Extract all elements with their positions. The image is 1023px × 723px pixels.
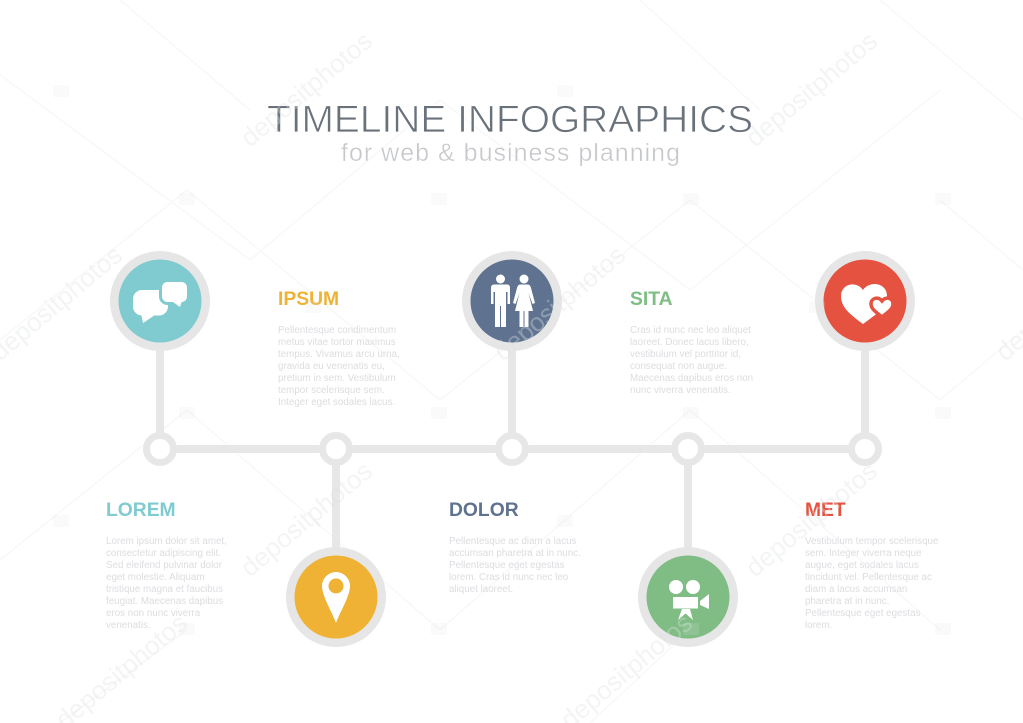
text block: lorem: tristique magna et faucibus xyxy=(106,584,223,595)
text block: sita: SITA xyxy=(630,289,673,310)
timeline connector xyxy=(146,345,878,555)
text block: dolor: Pellentesque ac diam a lacus xyxy=(449,536,577,547)
text block: ipsum xyxy=(278,289,400,408)
icon: movie camera xyxy=(638,547,738,647)
text block: ipsum: gravida eu venenatis eu, xyxy=(278,361,385,372)
text block: sita: Maecenas dapibus eros non xyxy=(630,373,753,384)
text block: met: pharetra at in nunc. xyxy=(805,596,889,607)
text: depositphotos xyxy=(235,26,378,153)
subtitle: for web & business planning xyxy=(341,139,680,167)
icon: man and woman xyxy=(462,251,562,351)
text: depositphotos xyxy=(235,456,378,583)
text block: sita: nunc viverra venenatis. xyxy=(630,385,731,396)
text block: met: sem. Integer viverra neque xyxy=(805,548,922,559)
text block: lorem: feugiat. Maecenas dapibus xyxy=(106,596,223,607)
text block: dolor xyxy=(449,500,581,595)
text block: lorem: eros non nunc viverra xyxy=(106,608,201,619)
text block: dolor: lorem. Cras id nunc nec leo xyxy=(449,572,569,583)
text block: lorem: Lorem ipsum dolor sit amet, xyxy=(106,536,227,547)
text block: sita: laoreet. Donec lacus libero, xyxy=(630,337,749,348)
text: depositphotos xyxy=(740,26,883,153)
text block: dolor: Pellentesque eget egestas xyxy=(449,560,565,571)
text block: dolor: accumsan pharetra at in nunc. xyxy=(449,548,581,559)
text block: ipsum: metus vitae tortor maximus xyxy=(278,337,396,348)
text block: met: augue, eget sodales lacus xyxy=(805,560,919,571)
text block: ipsum: tempus. Vivamus arcu urna, xyxy=(278,349,400,360)
text block: met: lorem. xyxy=(805,620,832,631)
text block: ipsum: IPSUM xyxy=(278,289,339,310)
text block: met: Pellentesque eget egestas xyxy=(805,608,921,619)
text block: sita xyxy=(630,289,753,396)
title: TIMELINE INFOGRAPHICS xyxy=(267,99,753,141)
text block: sita: consequat non augue. xyxy=(630,361,727,372)
text block: sita: vestibulum vel porttitor id, xyxy=(630,349,741,360)
icon: speech bubbles xyxy=(110,251,210,351)
text block: ipsum: pretium in sem. Vestibulum xyxy=(278,373,396,384)
text block: lorem: LOREM xyxy=(106,500,176,521)
icon: hearts xyxy=(815,251,915,351)
text block: lorem xyxy=(106,500,227,631)
text block: lorem: eget molestie. Aliquam xyxy=(106,572,205,583)
icon: location pin xyxy=(286,547,386,647)
text block: met: MET xyxy=(805,500,846,521)
text block: met xyxy=(805,500,939,631)
text: depositphotos xyxy=(488,240,631,367)
text block: met: tincidunt vel. Pellentesque ac xyxy=(805,572,932,583)
text block: lorem: consectetur adipiscing elit. xyxy=(106,548,221,559)
text block: lorem: Sed eleifend pulvinar dolor xyxy=(106,560,223,571)
text block: met: Vestibulum tempor scelerisque xyxy=(805,536,939,547)
text block: sita: Cras id nunc nec leo aliquet xyxy=(630,325,751,336)
text block: dolor: DOLOR xyxy=(449,500,519,521)
text: depositphotos xyxy=(740,456,883,583)
text block: lorem: venenatis. xyxy=(106,620,151,631)
text block: ipsum: Pellentesque condimentum xyxy=(278,325,396,336)
text block: dolor: aliquet laoreet. xyxy=(449,584,513,595)
text block: met: diam a lacus accumsan xyxy=(805,584,907,595)
text block: ipsum: tempor scelerisque sem. xyxy=(278,385,385,396)
text block: ipsum: Integer eget sodales lacus. xyxy=(278,397,395,408)
